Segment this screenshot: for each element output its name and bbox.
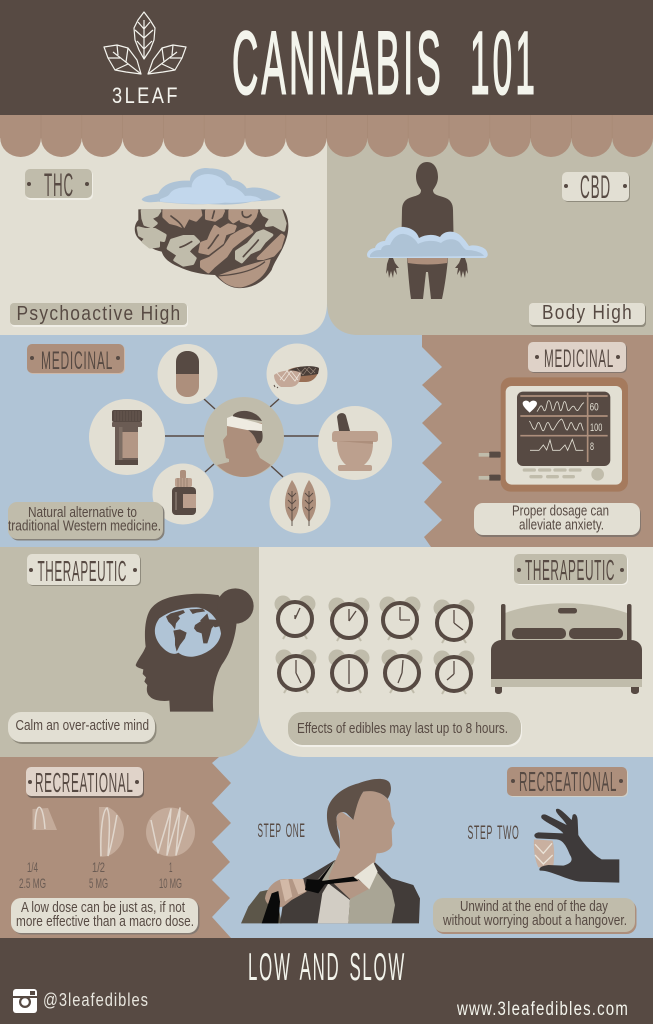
clock eight [434, 650, 474, 694]
medicinal label: MEDICINAL [41, 347, 113, 375]
caption: calm mind: Calm an over-active mind [16, 717, 149, 734]
clock seven [382, 650, 422, 693]
medicinal label [27, 344, 125, 375]
icon: heart monitor: 100 [590, 422, 602, 434]
caption: effects last: Effects of edibles may last up to 8 hours. [297, 720, 508, 737]
icon: pill bottle [89, 399, 165, 475]
panel: recreational right [241, 766, 637, 934]
decorative scalloped awning [0, 115, 653, 157]
logo: 3LEAF [104, 12, 186, 108]
header bar [0, 0, 653, 115]
CBD label: CBD [580, 169, 611, 205]
caption: proper dosage: alleviate anxiety. [519, 516, 604, 534]
panel: THC [0, 115, 327, 335]
panel: medicinal left [0, 335, 430, 547]
footer: LOW AND SLOW [248, 946, 406, 989]
clock three [380, 596, 420, 640]
clock five [276, 650, 316, 693]
icon: heart monitor: 60 [590, 402, 599, 414]
caption: unwind [433, 898, 636, 934]
icon: heart monitor: 8 [590, 441, 594, 453]
clock two [328, 598, 370, 641]
CBD label [562, 169, 630, 205]
Psychoactive High caption: Psychoactive High [16, 303, 182, 325]
dose labels: 10 MG [159, 875, 182, 891]
icon group: eight clocks [274, 596, 474, 694]
icon: cloud over brain [142, 168, 281, 205]
icon: cannabis leaves [270, 472, 330, 534]
recreational label [26, 767, 144, 798]
panel: therapeutic left [0, 547, 259, 757]
clock six [328, 650, 370, 693]
caption: unwind: Unwind at the end of the day [460, 898, 608, 915]
Body High caption: Body High [542, 302, 633, 324]
dose labels [19, 859, 182, 891]
icon: bandaged head [204, 397, 284, 477]
icon: quarter edible [32, 807, 57, 830]
caption: calm mind [8, 712, 156, 744]
icon: head with globe [136, 588, 254, 712]
panel: recreational right: STEP TWO [468, 823, 520, 844]
footer [0, 938, 653, 1024]
medicinal label [528, 342, 627, 373]
panel: therapeutic right [259, 547, 653, 757]
caption: proper dosage [474, 502, 641, 537]
logo leaves [104, 12, 186, 74]
THC label: THC [44, 167, 74, 203]
caption: natural alternative: Natural alternative to [28, 504, 137, 521]
panel: recreational right: STEP ONE [258, 821, 306, 842]
icon: heart monitor [479, 377, 628, 492]
logo: 3LEAF: 3LEAF [112, 83, 180, 108]
header bar: 101 [470, 12, 538, 112]
icon: dropper bottle [152, 464, 214, 524]
icon: body with cloud [367, 162, 488, 299]
dose labels: 2.5 MG [19, 875, 46, 891]
icon: bed [491, 603, 642, 694]
icon: edible brownies [266, 344, 328, 404]
caption: natural alternative: traditional Western medicine. [8, 518, 161, 534]
caption: effects last [288, 712, 522, 747]
caption: natural alternative [8, 502, 164, 540]
panel: recreational left: RECREATIONAL [35, 767, 134, 798]
illustration: man loosening tie [241, 779, 420, 923]
dose labels: 5 MG [89, 875, 108, 891]
caption: low dose: more effective than a macro dose. [16, 913, 194, 930]
connector lines [165, 399, 319, 477]
icon: mortar and pestle [318, 406, 392, 480]
icon: half edible [99, 807, 124, 857]
icon: whole edible [146, 808, 195, 856]
caption: low dose: A low dose can be just as, if not [21, 899, 186, 916]
illustration: hand holding edible [534, 809, 619, 883]
instagram handle: @3leafedibles [43, 990, 149, 1010]
icon: brain [135, 209, 288, 288]
icon: instagram [13, 989, 37, 1013]
dose labels: 1 [169, 859, 173, 875]
THC label [25, 167, 93, 203]
dose labels: 1/2 [92, 859, 105, 875]
clock one [274, 596, 316, 639]
caption: low dose [11, 898, 200, 934]
panel: recreational left [0, 757, 231, 938]
panel: medicinal right [422, 335, 653, 547]
therapeutic label [27, 554, 141, 588]
icon: pill [158, 344, 218, 404]
panel: therapeutic left: THERAPEUTIC [38, 556, 127, 588]
clock four [434, 600, 474, 643]
dose labels: 1/4 [27, 859, 38, 875]
panel: CBD [327, 115, 653, 335]
caption: proper dosage: Proper dosage can [512, 502, 609, 520]
